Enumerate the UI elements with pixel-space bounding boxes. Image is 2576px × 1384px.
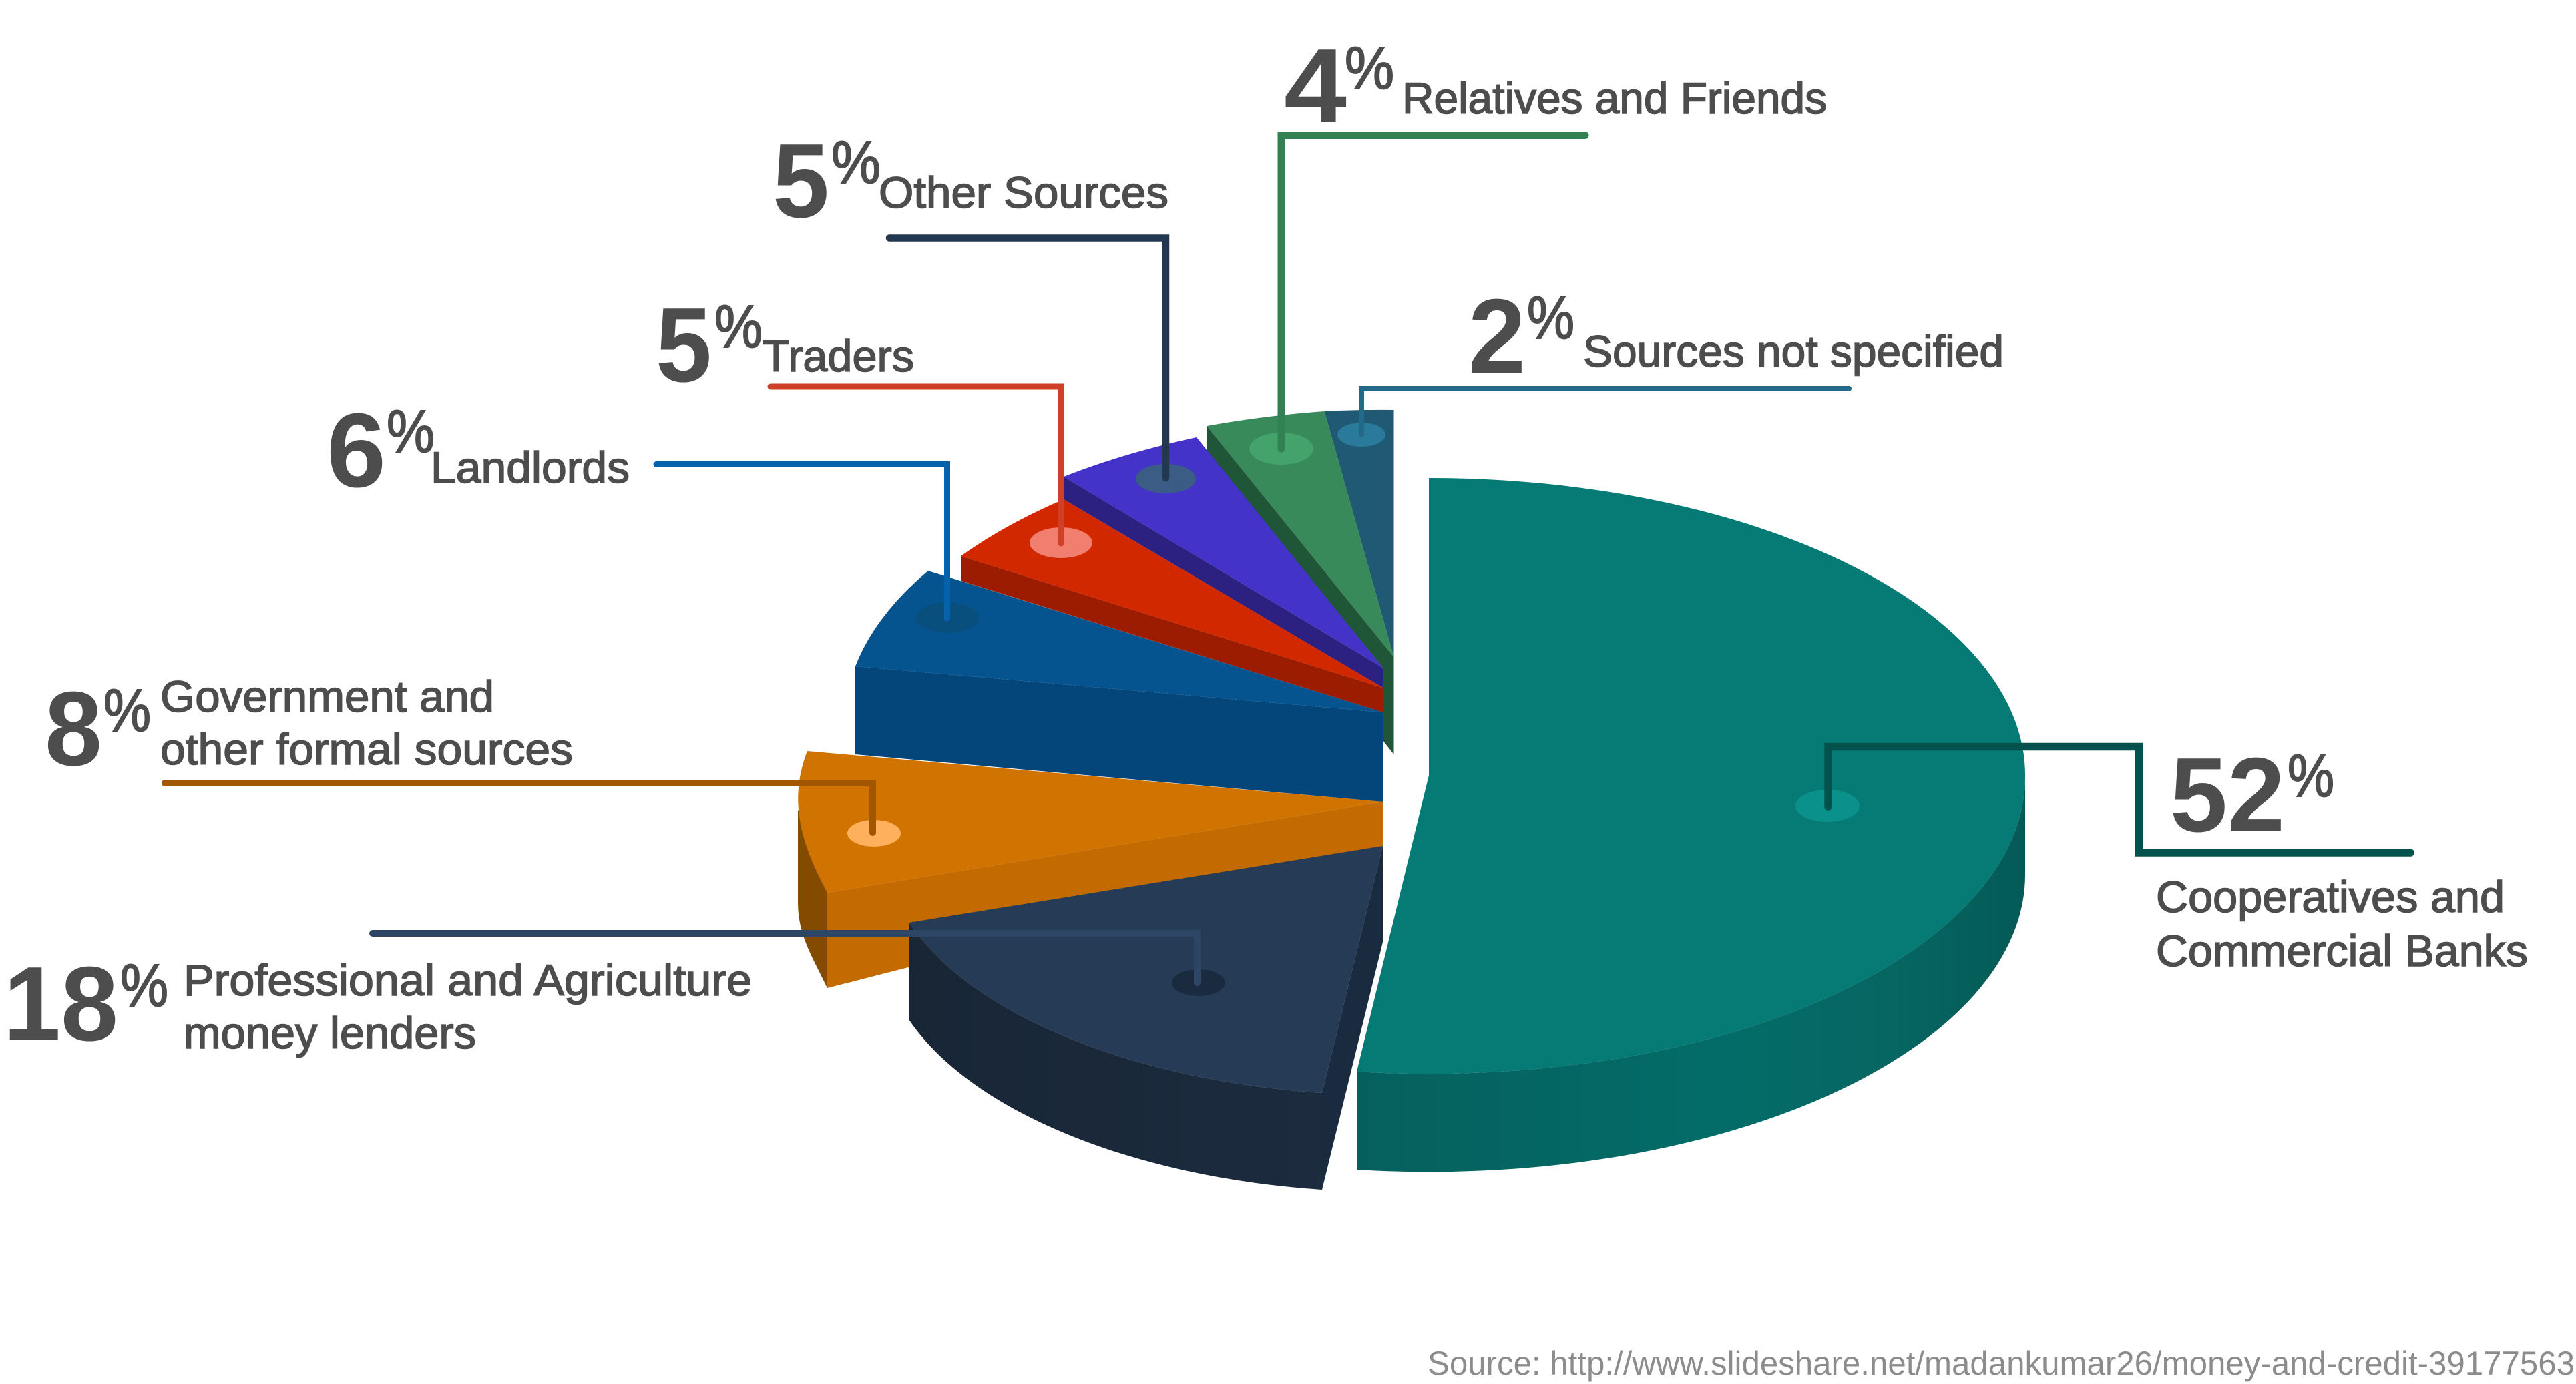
- label: 5% other sources: 5: [773, 122, 829, 240]
- label: 6% landlords: %: [387, 399, 435, 465]
- leader line: other sources: [889, 238, 1166, 478]
- label: 4% relatives and friends: [1284, 27, 1827, 145]
- label: 18% professional and agriculture money lenders: Professional and Agriculture: [184, 955, 752, 1005]
- label: 2% sources not specified: Sources not specified: [1583, 326, 2004, 376]
- label: 5% traders: %: [714, 294, 763, 361]
- label: 5% traders: Traders: [763, 331, 914, 381]
- slice: sources not specified 2%: [1325, 410, 1394, 657]
- label: 8% government and other formal sources: %: [103, 678, 151, 744]
- label: 5% other sources: %: [831, 130, 881, 196]
- slice: professional and agriculture money lenders 18%: [909, 846, 1383, 1190]
- label: 8% government and other formal sources: Government and: [160, 672, 494, 721]
- label: 5% other sources: Other Sources: [879, 168, 1168, 217]
- label: 18% professional and agriculture money lenders: money lenders: [184, 1008, 476, 1058]
- label: 6% landlords: Landlords: [431, 443, 630, 492]
- label: 52% cooperatives and commercial banks: Cooperatives and: [2156, 872, 2505, 921]
- label: 2% sources not specified: %: [1527, 285, 1574, 352]
- label: 18% professional and agriculture money lenders: [3, 945, 752, 1063]
- leader line: relatives and friends: [1281, 135, 1585, 449]
- slice: cooperatives and commercial banks 52%: [1357, 478, 2025, 1172]
- slice: traders 5%: [961, 499, 1383, 712]
- label: 4% relatives and friends: %: [1345, 35, 1394, 102]
- 3D pie chart: [798, 410, 2025, 1190]
- label: 4% relatives and friends: Relatives and Friends: [1402, 73, 1827, 123]
- label: 2% sources not specified: [1468, 278, 2004, 395]
- leader line: money lenders: [373, 933, 1197, 983]
- label: 4% relatives and friends: 4: [1284, 27, 1347, 145]
- leader line: government: [165, 783, 873, 833]
- label: 8% government and other formal sources: [45, 670, 573, 788]
- slice: government and other formal sources 8%: [798, 751, 1383, 988]
- label: 18% professional and agriculture money lenders: 18: [3, 945, 118, 1063]
- leader line: traders: [771, 387, 1061, 543]
- label: 8% government and other formal sources: other formal sources: [160, 724, 573, 774]
- leader line: sources not specified: [1361, 389, 1849, 435]
- slice: relatives and friends 4%: [1207, 411, 1394, 754]
- slice: other sources 5%: [1064, 437, 1383, 688]
- leader line: landlords: [656, 465, 947, 618]
- label: 52% cooperatives and commercial banks: %: [2288, 743, 2334, 810]
- label: 6% landlords: [327, 392, 630, 509]
- label: 6% landlords: 6: [327, 392, 386, 509]
- label: 2% sources not specified: 2: [1468, 278, 1526, 395]
- label: 5% traders: [656, 286, 914, 404]
- label: 18% professional and agriculture money lenders: %: [120, 953, 168, 1019]
- source note: Source: http://www.slideshare.net/madankumar26/money-and-credit-39177563: [1428, 1345, 2575, 1382]
- slice: landlords 6%: [855, 571, 1383, 802]
- label: 52% cooperatives and commercial banks: [2156, 736, 2528, 975]
- leader line: cooperatives: [1828, 746, 2410, 853]
- label: 8% government and other formal sources: 8: [45, 670, 102, 788]
- label: 5% other sources: [773, 122, 1168, 240]
- label: 52% cooperatives and commercial banks: Commercial Banks: [2156, 926, 2528, 975]
- label: 5% traders: 5: [656, 286, 712, 404]
- label: 52% cooperatives and commercial banks: 52: [2170, 736, 2285, 854]
